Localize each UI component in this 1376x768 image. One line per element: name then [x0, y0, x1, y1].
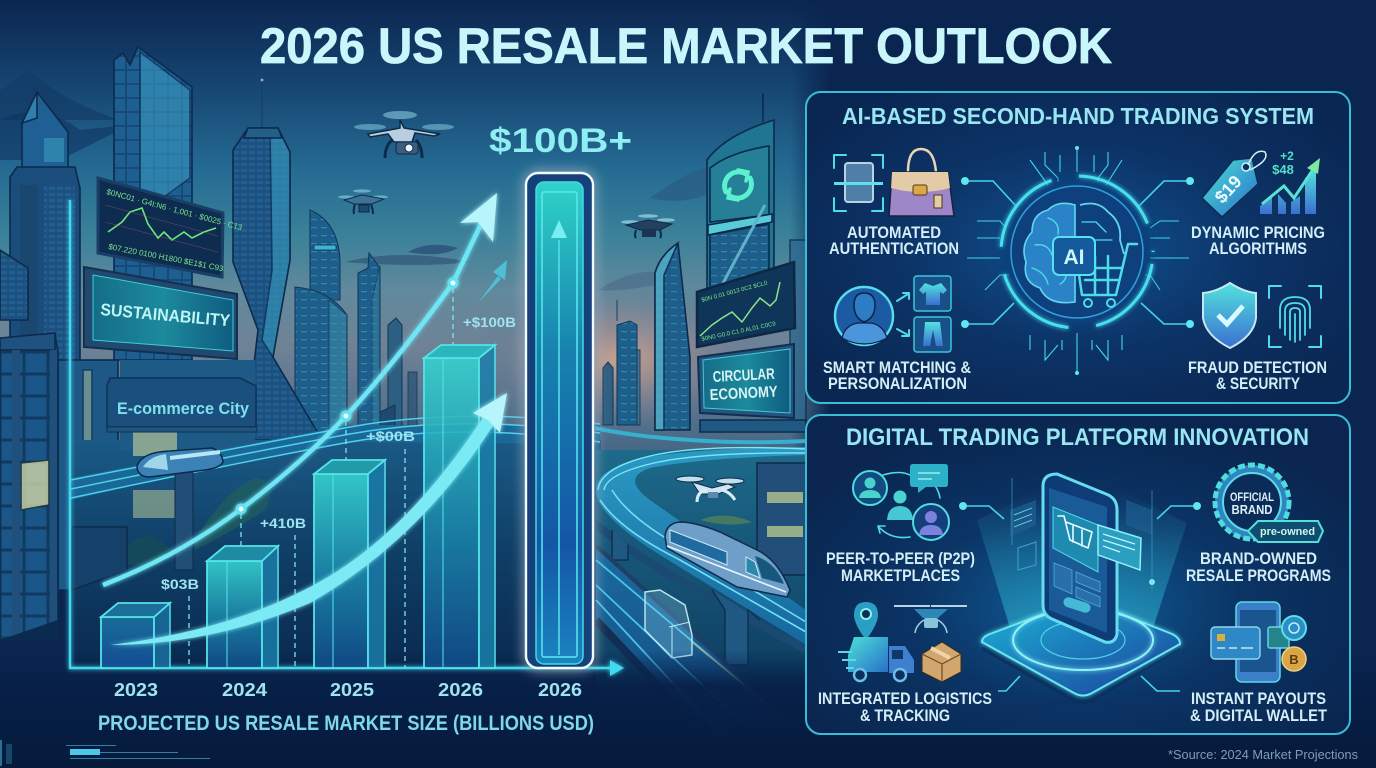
icon: rising price chart — [1260, 149, 1320, 214]
label: fraud detection: & SECURITY — [1216, 375, 1300, 393]
viaduct roads: right — [590, 428, 806, 768]
sign: ticker screen — [98, 178, 244, 277]
connector nodes — [959, 502, 1201, 510]
label: dynamic pricing: DYNAMIC PRICING — [1191, 224, 1325, 242]
bar 2024 — [207, 546, 278, 668]
icon: AI brain and cart: AI — [1064, 246, 1084, 269]
icon: price tag — [1202, 151, 1266, 217]
sign: right ticker — [697, 262, 795, 347]
source note: *Source: 2024 Market Projections — [1168, 747, 1358, 762]
icon: official brand badge — [1215, 465, 1323, 542]
icon: AI brain and cart — [1001, 176, 1153, 328]
year labels: 2025 — [330, 680, 374, 700]
label: automated authentication — [829, 224, 959, 258]
year labels: 2026 — [538, 680, 582, 700]
panel heading: AI-BASED SECOND-HAND TRADING SYSTEM — [842, 103, 1314, 129]
lower cityscape backdrop — [71, 360, 601, 668]
label: peer-to-peer: PEER-TO-PEER (P2P) — [826, 550, 975, 568]
label: instant payouts: & DIGITAL WALLET — [1190, 707, 1327, 725]
connector nodes — [961, 146, 1194, 375]
sign: right ticker: $0N 0.01 0013 0C2 $CL0 — [701, 280, 769, 304]
value labels — [161, 314, 516, 592]
icon: official brand badge: BRAND — [1232, 502, 1272, 517]
sign: ticker screen: $0NC01 · G4I:N6 · 1,001 · $0025 · C13 — [105, 187, 244, 232]
value labels: $03B — [161, 576, 199, 592]
sign: E-commerce City — [107, 378, 257, 432]
bar 2023 — [101, 603, 170, 668]
icon: user profile — [835, 287, 893, 345]
year labels: 2024 — [222, 680, 267, 700]
icon: fingerprint — [1269, 286, 1321, 347]
label: brand-owned: BRAND-OWNED — [1200, 550, 1317, 568]
chart: projected market size — [70, 122, 632, 735]
data points — [237, 279, 457, 513]
label: fraud detection — [1188, 359, 1327, 393]
bar 2025 — [314, 460, 385, 668]
value labels: +$100B — [463, 314, 516, 330]
label: automated authentication: AUTHENTICATION — [829, 240, 959, 258]
label: dynamic pricing: ALGORITHMS — [1209, 240, 1307, 258]
sign: Circular Economy: CIRCULAR — [712, 366, 775, 386]
drone: over highway — [676, 476, 744, 502]
panel heading: DIGITAL TRADING PLATFORM INNOVATION — [846, 424, 1309, 451]
sign: E-commerce City: E-commerce City — [117, 399, 250, 418]
distant skyline — [295, 210, 640, 440]
icon: smartphone on platform — [977, 474, 1187, 704]
label: integrated logistics — [818, 690, 992, 725]
left foreground buildings — [0, 333, 118, 640]
icon: official brand badge: pre-owned — [1260, 526, 1315, 538]
value labels: +410B — [260, 515, 306, 531]
value labels: +$00B — [366, 428, 415, 444]
label: smart matching — [823, 359, 971, 393]
label: dynamic pricing — [1191, 224, 1325, 258]
train: right — [665, 522, 790, 597]
year labels: 2026 — [438, 680, 483, 700]
panel: AI-based second-hand trading system — [806, 92, 1350, 403]
label: peer-to-peer — [826, 550, 975, 585]
train: left — [137, 448, 223, 477]
icon: rising price chart: $48 — [1272, 162, 1294, 177]
lower page floor — [0, 650, 1376, 768]
connectors — [967, 148, 1189, 372]
sign: right ticker: $0N0 G0.0 C1.0 AL01 C0C9 — [701, 321, 777, 343]
icon: clothing matches — [897, 276, 951, 352]
icon: official brand badge: OFFICIAL — [1230, 490, 1274, 504]
sign: Circular Economy — [698, 344, 794, 418]
bar 2026 — [424, 345, 495, 668]
icon: payments wallet: B — [1289, 652, 1299, 667]
label: instant payouts — [1190, 690, 1327, 725]
icon: peer-to-peer — [853, 464, 949, 540]
chart caption: PROJECTED US RESALE MARKET SIZE (BILLIONS USD) — [98, 712, 594, 735]
sign: Sustainability — [84, 267, 237, 359]
sign: ticker screen: $07.220 0100 H1800 $E1$1 C93 — [108, 242, 225, 273]
label: brand-owned — [1186, 550, 1331, 585]
elevated rail: left — [71, 416, 600, 570]
callout: $100B+: $100B+ — [489, 122, 632, 160]
label: peer-to-peer: MARKETPLACES — [841, 567, 960, 585]
drone: large — [354, 111, 454, 158]
dashed guides — [189, 288, 453, 668]
decorative UI bars — [0, 740, 210, 766]
pod vehicle — [645, 590, 692, 658]
label: smart matching: PERSONALIZATION — [828, 375, 967, 393]
icon: authentication scan — [834, 155, 883, 211]
drone: small right — [621, 214, 675, 238]
year labels: 2023 — [114, 680, 158, 700]
label: automated authentication: AUTOMATED — [847, 224, 941, 242]
small growth arrow — [478, 260, 507, 303]
icon: payments wallet — [1211, 602, 1306, 682]
icon: recycling arrows — [725, 170, 751, 200]
label: integrated logistics: & TRACKING — [860, 707, 950, 725]
label: brand-owned: RESALE PROGRAMS — [1186, 567, 1331, 585]
left towers — [0, 47, 322, 440]
icon: rising price chart: +2 — [1280, 149, 1294, 163]
trend arrow: upper — [103, 193, 497, 585]
icon: shield — [1203, 283, 1256, 348]
label: smart matching: SMART MATCHING & — [823, 359, 971, 377]
icon: handbag — [889, 149, 954, 216]
sign: Sustainability: SUSTAINABILITY — [100, 300, 231, 330]
icon: logistics — [838, 602, 967, 682]
sign: Circular Economy: ECONOMY — [709, 383, 779, 404]
panel: digital trading platform innovation — [806, 415, 1350, 734]
label: instant payouts: INSTANT PAYOUTS — [1191, 690, 1326, 708]
highlighted bar 2026 — [526, 173, 593, 668]
right cityscape towers — [655, 93, 806, 432]
title: 2026 US RESALE MARKET OUTLOOK — [260, 18, 1112, 74]
icon: price tag: $19 — [1211, 171, 1246, 207]
label: fraud detection: FRAUD DETECTION — [1188, 359, 1327, 377]
drone: small left — [338, 189, 388, 214]
axes — [70, 200, 624, 676]
year labels — [114, 680, 582, 700]
trend arrow: lower — [110, 393, 507, 645]
connectors — [967, 506, 1193, 691]
label: integrated logistics: INTEGRATED LOGISTICS — [818, 690, 992, 708]
